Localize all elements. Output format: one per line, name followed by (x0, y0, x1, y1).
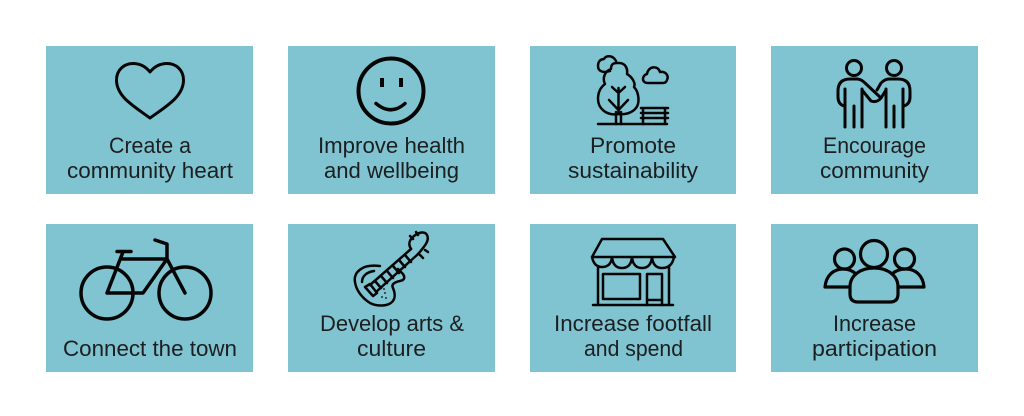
label: increase participation: participation (812, 336, 937, 361)
icon: electric guitar (355, 232, 428, 306)
label: create a community heart (67, 133, 233, 183)
panel: develop arts and culture (288, 224, 495, 372)
label: encourage community: community (820, 158, 929, 183)
label: promote sustainability (568, 133, 698, 183)
label: encourage community (820, 133, 929, 183)
label: improve health and wellbeing: and wellbeing (324, 158, 459, 183)
label: develop arts and culture: Develop arts & (320, 311, 464, 336)
label: promote sustainability: Promote (590, 133, 676, 158)
panel: increase footfall and spend (530, 224, 736, 372)
label: increase participation (812, 311, 937, 361)
label: increase footfall and spend (554, 311, 712, 361)
panel: increase participation (771, 224, 978, 372)
panel: connect the town (46, 224, 253, 372)
panel: encourage community (771, 46, 978, 194)
icon: group of three people (825, 240, 924, 302)
icon: bicycle (81, 240, 211, 319)
label: increase participation: Increase (833, 311, 916, 336)
label: promote sustainability: sustainability (568, 158, 698, 183)
icon: two people holding hands (838, 60, 910, 127)
label: create a community heart: Create a (109, 133, 192, 158)
label: create a community heart: community heart (67, 158, 233, 183)
icon: tree, bench and clouds (598, 56, 668, 124)
panel: create a community heart (46, 46, 253, 194)
icon: heart (116, 64, 184, 118)
icon: smiley face (358, 58, 424, 124)
panel: improve health and wellbeing (288, 46, 495, 194)
label: improve health and wellbeing: Improve health (318, 133, 465, 158)
panel: promote sustainability (530, 46, 736, 194)
label: improve health and wellbeing (318, 133, 465, 183)
label: develop arts and culture (320, 311, 464, 361)
label: develop arts and culture: culture (357, 336, 426, 361)
icon: shop front (592, 239, 675, 305)
label: increase footfall and spend: Increase footfall (554, 311, 712, 336)
label: connect the town: Connect the town (63, 336, 237, 361)
label: encourage community: Encourage (823, 133, 926, 158)
label: increase footfall and spend: and spend (584, 336, 683, 361)
